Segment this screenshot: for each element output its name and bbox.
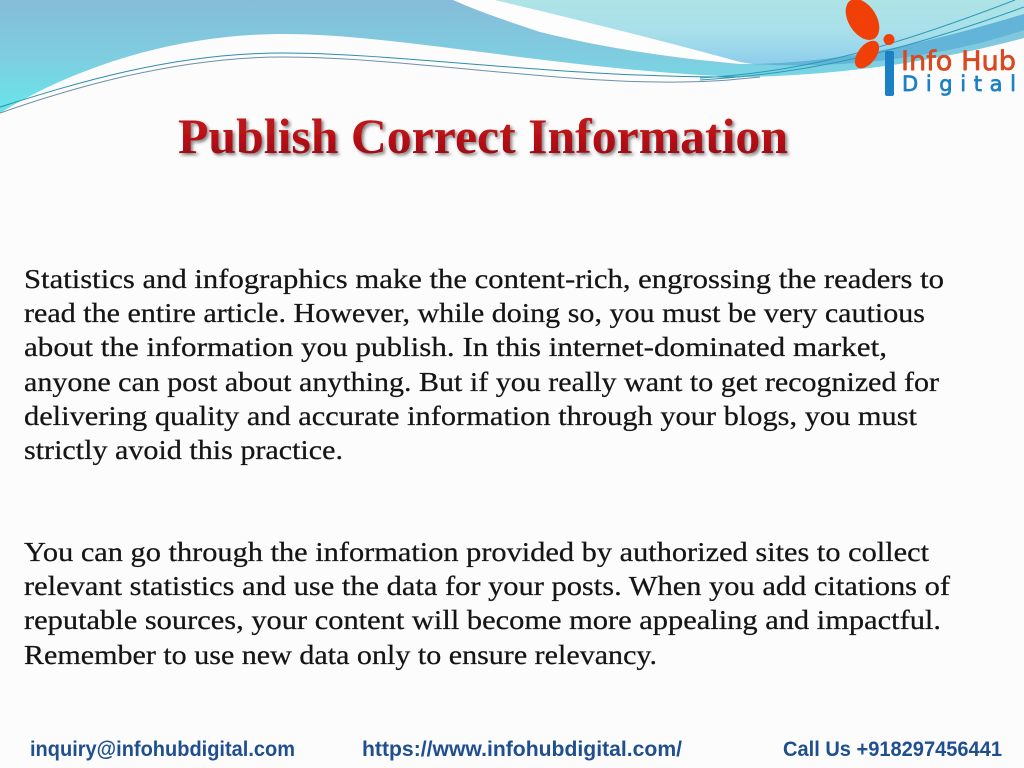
text block: first paragraph: strictly avoid this practice. (24, 434, 343, 465)
text block: second paragraph: reputable sources, your content will become more appealing and impactful. (24, 604, 941, 635)
text block: first paragraph: delivering quality and accurate information through your blogs, you must (24, 400, 917, 431)
footer email: inquiry@infohubdigital.com (30, 738, 295, 761)
logo wordmark: Digital: Digital (902, 72, 1016, 96)
footer phone: Call Us +918297456441 (783, 738, 1002, 761)
text block: second paragraph: relevant statistics and use the data for your posts. When you add citations of (24, 570, 951, 601)
icon: large orange petal (839, 0, 886, 46)
logo: Info Hub Digital (839, 0, 1016, 96)
footer contact details (30, 738, 1002, 761)
icon: orange dot (884, 34, 894, 45)
footer website: https://www.infohubdigital.com/ (362, 738, 682, 761)
text block: second paragraph: Remember to use new data only to ensure relevancy. (24, 639, 657, 670)
icon: small orange petal (850, 36, 884, 73)
text block: second paragraph (24, 536, 951, 670)
text block: first paragraph: about the information you publish. In this internet-dominated market, (24, 331, 887, 362)
logo wordmark: Info Hub: Info Hub (901, 46, 1016, 77)
text block: first paragraph: read the entire article. However, while doing so, you must be very cautious (24, 297, 925, 328)
text block: second paragraph: You can go through the information provided by authorized sites to collect (24, 536, 929, 567)
icon: blue bar (885, 51, 894, 96)
header wave banner (0, 0, 1024, 113)
text block: first paragraph: anyone can post about anything. But if you really want to get recognized for (24, 366, 939, 397)
title: Publish Correct Information (178, 108, 788, 164)
text block: first paragraph (24, 263, 944, 465)
text block: first paragraph: Statistics and infographics make the content-rich, engrossing the readers to (24, 263, 944, 294)
